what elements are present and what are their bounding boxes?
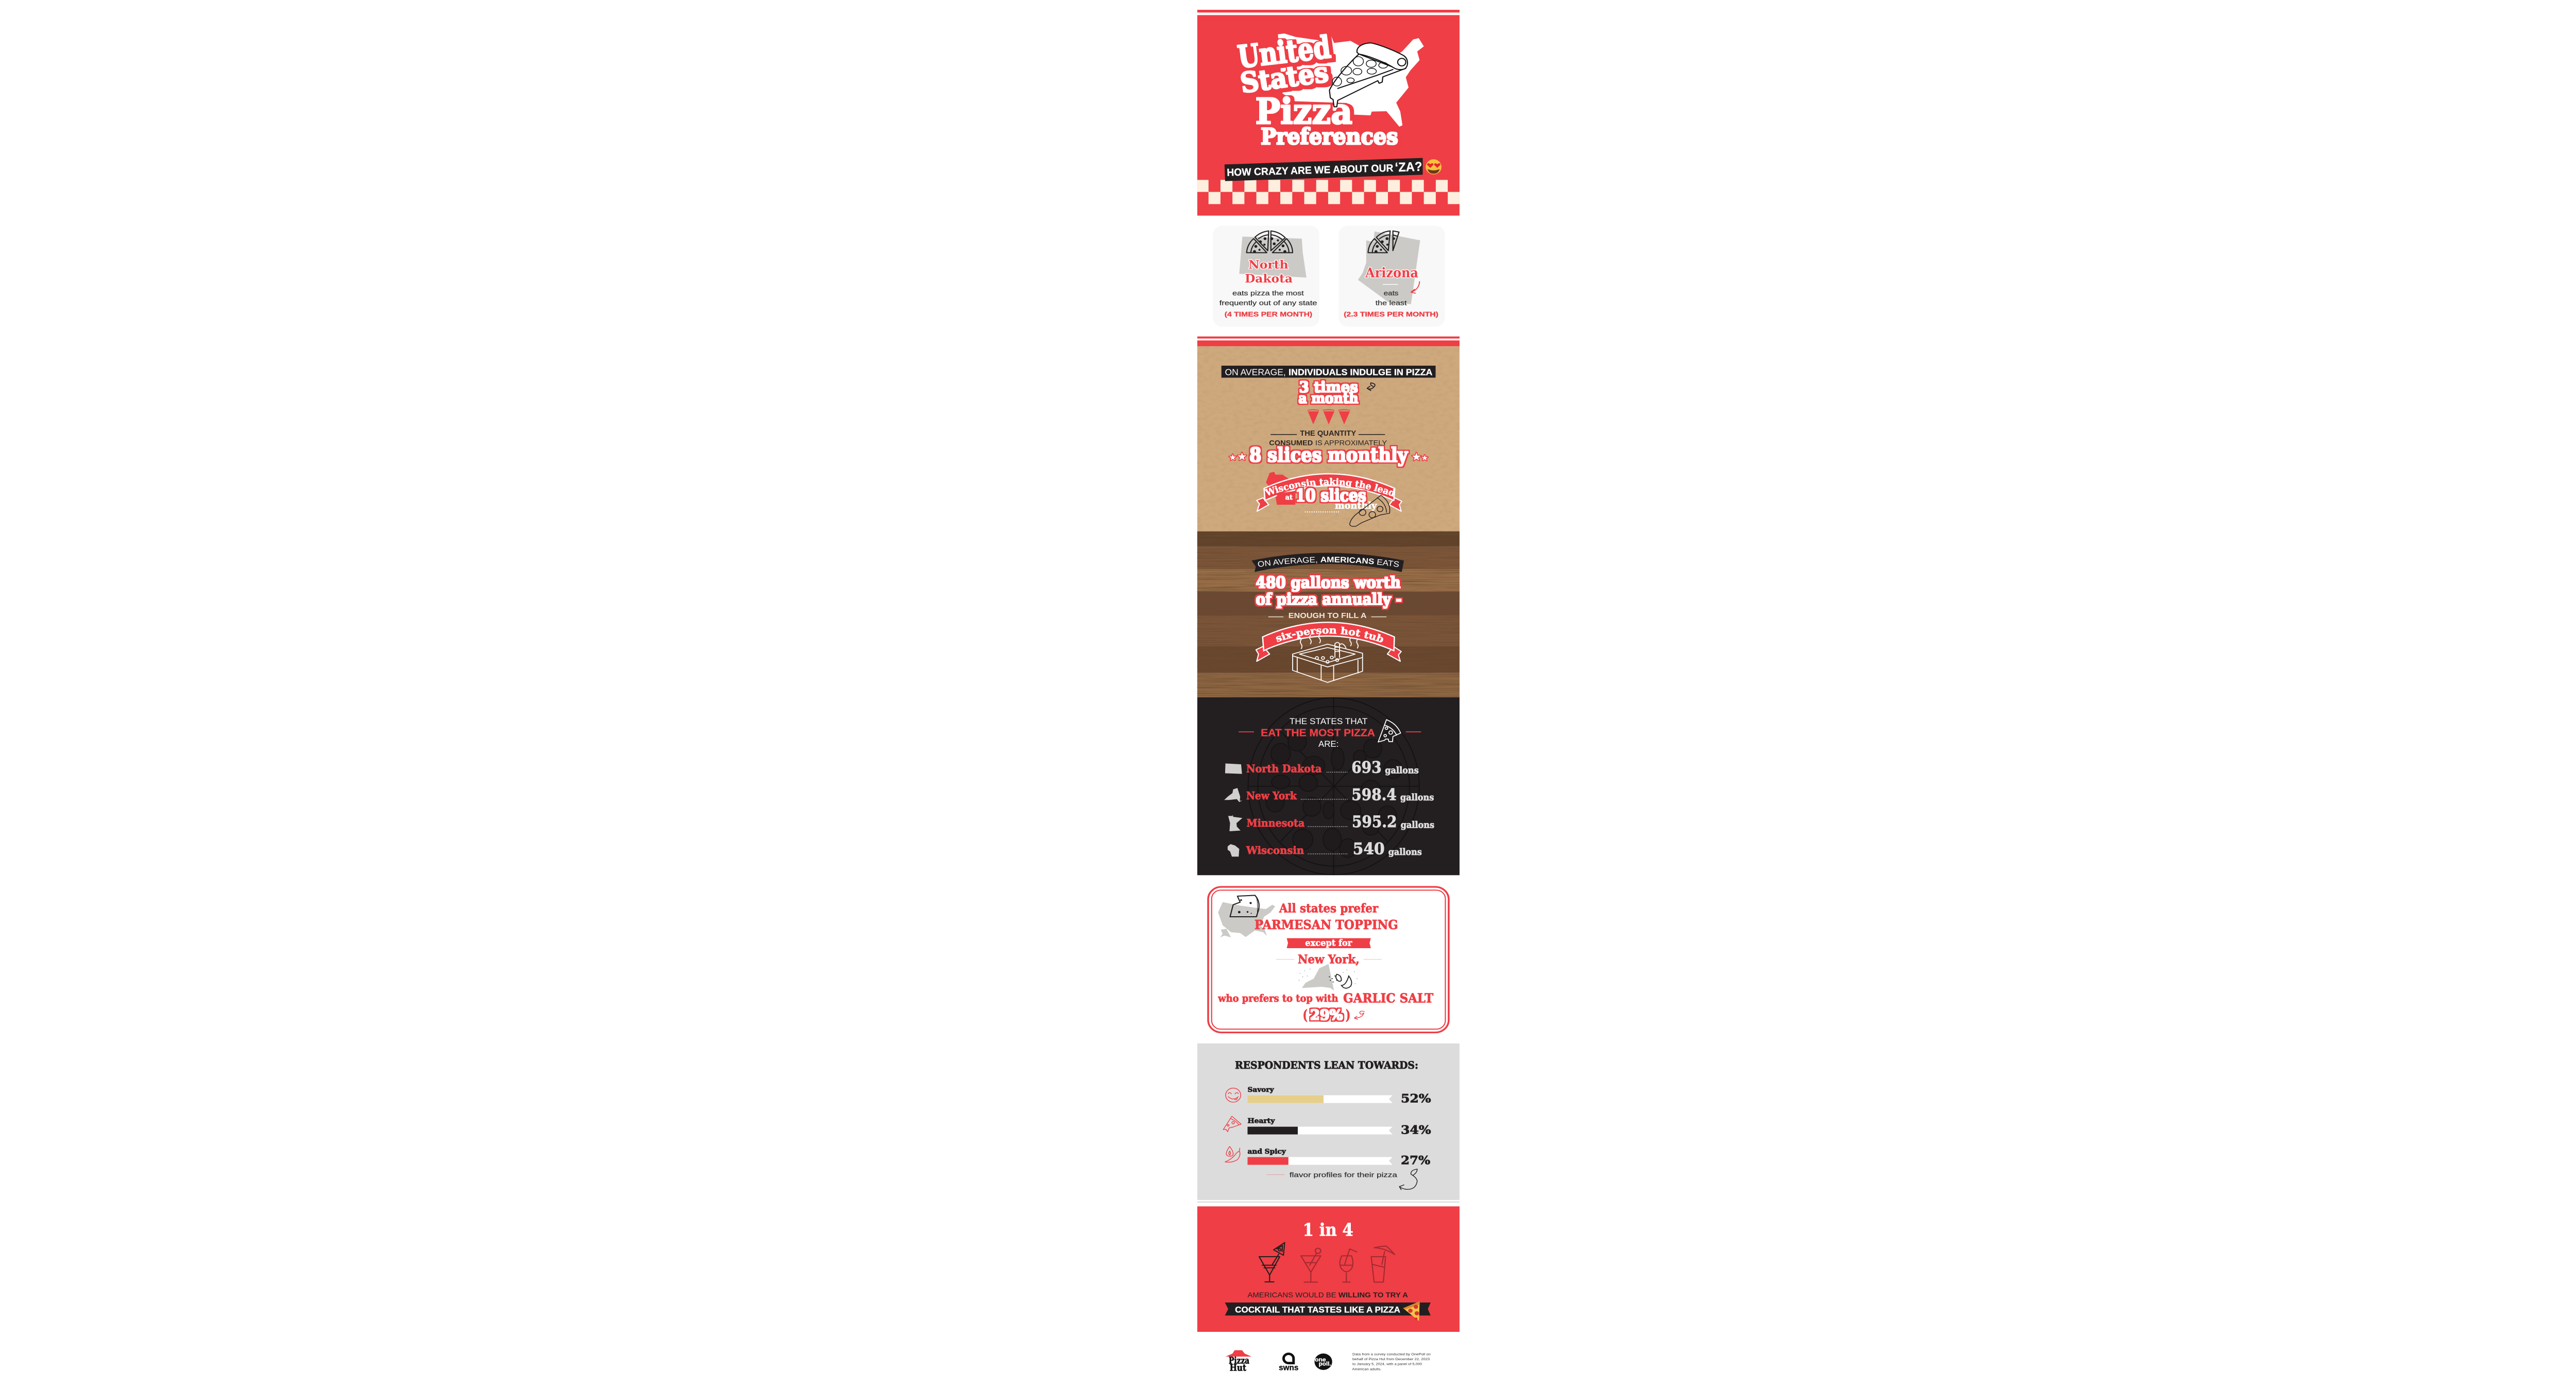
panel: wood gallons section — [1197, 532, 1460, 697]
panel: cardboard frequency section — [1197, 336, 1460, 532]
stat: 8 slices monthly: 8 slices monthly — [1249, 443, 1409, 467]
text: source note: Data from a survey conducted by OnePoll on — [1352, 1353, 1431, 1357]
text: source note: behalf of Pizza Hut from December 22, 2023 — [1352, 1358, 1430, 1361]
icon: white slice — [1378, 719, 1401, 742]
row: Wisconsin: 540 — [1353, 839, 1385, 858]
text: flavor profiles: flavor profiles for their pizza — [1290, 1171, 1397, 1178]
ribbon: except for — [1287, 938, 1371, 948]
title: United — [1235, 29, 1333, 75]
banner: on average Americans eats — [1252, 553, 1404, 572]
text: parmesan topping: PARMESAN TOPPING — [1255, 918, 1398, 932]
text: source note — [1352, 1353, 1431, 1372]
stat: 3 times a month — [1298, 379, 1358, 406]
text: willing to try — [1247, 1291, 1408, 1299]
ribbon: Wisconsin: monthly — [1335, 501, 1377, 511]
bar: spicy: and Spicy — [1247, 1147, 1286, 1156]
panel: hero header — [1197, 10, 1460, 216]
icon: New York map with garlic — [1299, 964, 1358, 990]
row: North Dakota: gallons — [1385, 765, 1419, 776]
bar: savory — [1226, 1086, 1431, 1105]
card text: the least — [1376, 299, 1407, 307]
icon: pizza emoji — [1403, 1301, 1420, 1321]
stat: 480 gallons: of pizza annually - — [1256, 590, 1402, 609]
icon: red arrow — [1411, 282, 1419, 293]
logo: OnePoll — [1314, 1353, 1332, 1370]
heading — [1239, 716, 1421, 749]
logo: Pizza Hut — [1226, 1350, 1251, 1373]
checkerboard band — [1197, 180, 1460, 204]
icon: map of the United States — [1278, 33, 1424, 127]
ribbon: Wisconsin: at — [1285, 493, 1293, 502]
stat: 29 percent: ( — [1303, 1007, 1308, 1023]
icon: squiggle arrow — [1367, 383, 1375, 390]
bar: spicy: 27% — [1401, 1153, 1430, 1167]
subtitle banner: ‘ZA? — [1395, 160, 1422, 175]
row: North Dakota: North Dakota — [1246, 763, 1322, 775]
ribbon: Wisconsin: 10 slices — [1295, 485, 1366, 506]
row: New York: 598.4 — [1351, 785, 1397, 804]
ribbon: except for: except for — [1305, 938, 1352, 948]
ribbon: Wisconsin — [1256, 472, 1402, 512]
card text — [1219, 289, 1317, 318]
text: garlic salt: GARLIC SALT — [1343, 991, 1434, 1005]
stat: 3 times a month: a month — [1298, 390, 1358, 406]
stat: 480 gallons: 480 gallons worth — [1256, 574, 1401, 592]
card: Arizona — [1338, 226, 1445, 327]
heading: ARE: — [1318, 739, 1338, 749]
panel: flavor profile bars — [1197, 1043, 1460, 1203]
banner text: ON AVERAGE, — [1225, 367, 1286, 377]
icon: three slices — [1308, 409, 1350, 424]
logo: OnePoll: poll. — [1319, 1361, 1331, 1367]
card text — [1344, 289, 1438, 318]
text: willing to try: WILLING TO TRY A — [1338, 1291, 1408, 1299]
ribbon: Wisconsin: Wisconsin taking the lead — [1265, 478, 1396, 496]
icon: olive martini — [1301, 1248, 1321, 1282]
text: enough to fill a: ENOUGH TO FILL A — [1289, 611, 1367, 620]
banner: on average Americans eats: ON AVERAGE, AMERICANS EATS — [1258, 557, 1399, 567]
panel: parmesan and garlic salt — [1208, 887, 1449, 1033]
logo: SWNS — [1279, 1354, 1299, 1372]
stat: 3 times a month: 3 times — [1299, 379, 1358, 396]
bar: hearty — [1223, 1116, 1431, 1137]
ribbon: cocktail that tastes like a pizza — [1225, 1303, 1431, 1315]
card text: (2.3 TIMES PER MONTH) — [1344, 310, 1438, 318]
bar: savory: 52% — [1401, 1091, 1431, 1105]
icon: tall glass with umbrella — [1371, 1246, 1395, 1282]
card text: frequently out of any state — [1219, 299, 1317, 307]
heading: RESPONDENTS LEAN TOWARDS: — [1235, 1059, 1418, 1071]
title — [1235, 29, 1398, 150]
text: the quantity: CONSUMED — [1269, 439, 1313, 447]
icon: stars: ★ — [1237, 451, 1247, 463]
icon: pizza cocktail glass — [1259, 1243, 1285, 1282]
watermark: pizza outline — [1248, 698, 1419, 875]
icon: stars — [1229, 451, 1428, 464]
stat: 29 percent: ) — [1346, 1007, 1350, 1023]
banner text — [1222, 366, 1436, 378]
bar: hearty: 34% — [1401, 1123, 1431, 1137]
row: North Dakota — [1225, 759, 1419, 777]
card: North Dakota — [1213, 226, 1319, 327]
icon: hot tub — [1293, 635, 1363, 682]
title: Preferences — [1261, 124, 1398, 150]
text: New York: New York, — [1298, 952, 1360, 966]
row: Minnesota: gallons — [1401, 820, 1434, 830]
logo: Pizza Hut: Pizza — [1229, 1356, 1249, 1366]
icon: red squiggle arrow — [1354, 1011, 1364, 1019]
icon: stars: ★ — [1229, 453, 1236, 462]
bar: spicy — [1225, 1146, 1430, 1167]
icon: black squiggle arrow — [1399, 1169, 1417, 1190]
logo: Pizza Hut: Hut — [1230, 1363, 1247, 1373]
icon: heart eyes emoji — [1426, 159, 1442, 175]
text: who prefers to top with: who prefers to top with — [1217, 992, 1338, 1004]
icon: pizza slice illustration — [1329, 43, 1408, 107]
text: willing to try: AMERICANS WOULD BE — [1247, 1291, 1336, 1299]
ribbon: cocktail that tastes like a pizza: COCKTAIL THAT TASTES LIKE A PIZZA — [1235, 1305, 1400, 1314]
icon: US map with cheese — [1218, 895, 1275, 937]
logo: OnePoll: one — [1315, 1357, 1326, 1363]
row: Wisconsin — [1228, 839, 1422, 858]
state name — [1245, 258, 1293, 285]
bar: savory: Savory — [1247, 1086, 1274, 1094]
subtitle banner: HOW CRAZY ARE WE ABOUT OUR — [1227, 162, 1394, 178]
ribbon: six-person hot tub — [1255, 622, 1402, 662]
icon: outlined slice — [1350, 495, 1390, 526]
text: the quantity: IS APPROXIMATELY — [1315, 439, 1387, 447]
row: Wisconsin: gallons — [1388, 847, 1422, 858]
heading: THE STATES THAT — [1290, 716, 1368, 726]
icon: stars: ★ — [1421, 453, 1428, 462]
icon: stars: ★ — [1411, 451, 1421, 464]
state name: North — [1248, 258, 1289, 271]
panel: North Dakota and Arizona cards — [1213, 226, 1445, 327]
state name: Dakota — [1245, 271, 1293, 285]
row: Wisconsin: Wisconsin — [1246, 845, 1304, 857]
card text: (4 TIMES PER MONTH) — [1225, 310, 1312, 318]
stat: 480 gallons — [1256, 574, 1402, 609]
text: source note: to January 5, 2024, with a panel of 5,000 — [1352, 1363, 1422, 1366]
text: all states prefer: All states prefer — [1279, 901, 1378, 915]
row: North Dakota: 693 — [1351, 759, 1381, 777]
banner text: INDIVIDUALS INDULGE IN PIZZA — [1289, 367, 1432, 377]
bar: hearty: Hearty — [1247, 1117, 1275, 1125]
row: New York: gallons — [1400, 793, 1434, 803]
text: the quantity — [1269, 429, 1387, 447]
row: Minnesota: Minnesota — [1247, 817, 1304, 830]
state name: Arizona — [1365, 265, 1418, 281]
card text: eats pizza the most — [1232, 289, 1304, 297]
subtitle banner — [1225, 158, 1423, 181]
row: Minnesota: 595.2 — [1352, 813, 1397, 831]
text: the quantity: THE QUANTITY — [1300, 429, 1356, 438]
row: Minnesota — [1228, 813, 1434, 831]
title: States — [1238, 56, 1331, 99]
panel: states that eat the most pizza — [1197, 697, 1460, 875]
heading: EAT THE MOST PIZZA — [1261, 727, 1375, 739]
title: Pizza — [1255, 91, 1352, 132]
stat: 1 in 4: 1 in 4 — [1303, 1220, 1353, 1240]
panel: cocktail stat — [1197, 1206, 1460, 1373]
card text: eats — [1384, 289, 1398, 297]
icon: wine glass with straw — [1340, 1249, 1357, 1282]
logo: SWNS: swns — [1279, 1364, 1299, 1372]
stat: 29 percent: 29% — [1310, 1007, 1343, 1023]
text: source note: American adults. — [1352, 1368, 1382, 1372]
row: New York — [1224, 785, 1434, 804]
ribbon: six-person hot tub: six-person hot tub — [1276, 626, 1383, 643]
row: New York: New York — [1246, 790, 1297, 802]
